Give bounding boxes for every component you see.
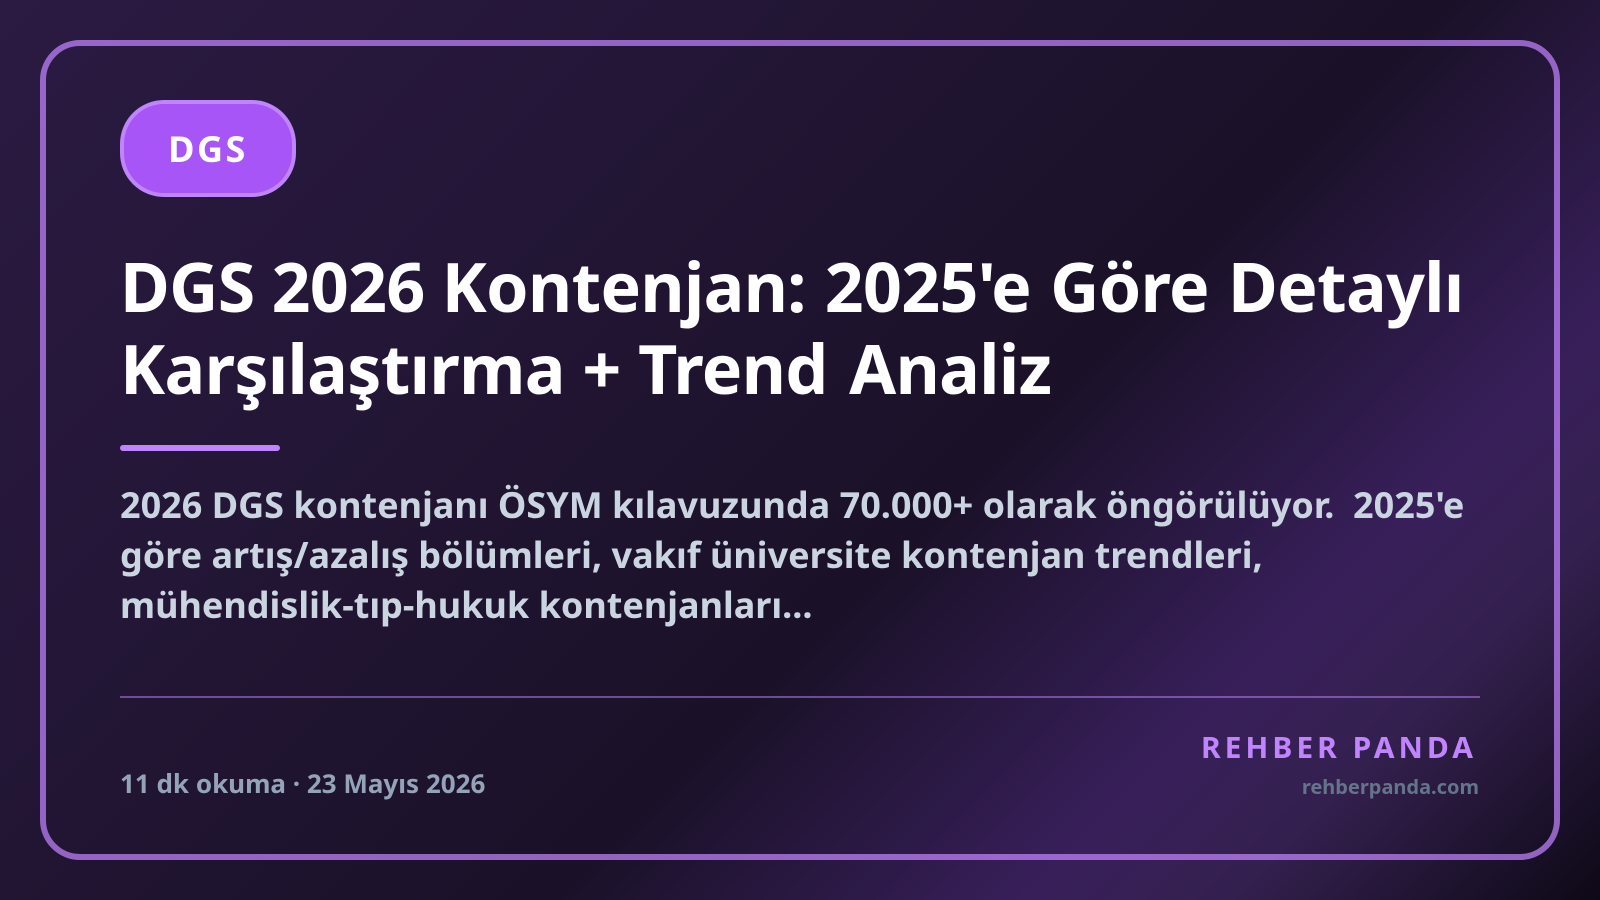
website: rehberpanda.com xyxy=(1302,773,1479,800)
category badge: DGS xyxy=(120,100,296,197)
description text: 2026 DGS kontenjanı ÖSYM kılavuzunda 70.000+ olarak öngörülüyor. 2025'e xyxy=(120,480,1464,529)
reading time and date: 11 dk okuma · 23 Mayıs 2026 xyxy=(120,765,485,801)
description text: mühendislik-tıp-hukuk kontenjanları... xyxy=(120,580,812,629)
title: Karşılaştırma + Trend Analiz xyxy=(120,321,1051,414)
brand name: REHBER PANDA xyxy=(1201,726,1477,767)
description text: göre artış/azalış bölümleri, vakıf üniversite kontenjan trendleri, xyxy=(120,530,1263,579)
accent bar xyxy=(120,445,280,451)
title: DGS 2026 Kontenjan: 2025'e Göre Detaylı xyxy=(120,239,1464,332)
title xyxy=(120,239,1464,414)
divider xyxy=(120,696,1480,698)
category badge: DGS: DGS xyxy=(168,124,248,173)
description text xyxy=(120,480,1464,629)
